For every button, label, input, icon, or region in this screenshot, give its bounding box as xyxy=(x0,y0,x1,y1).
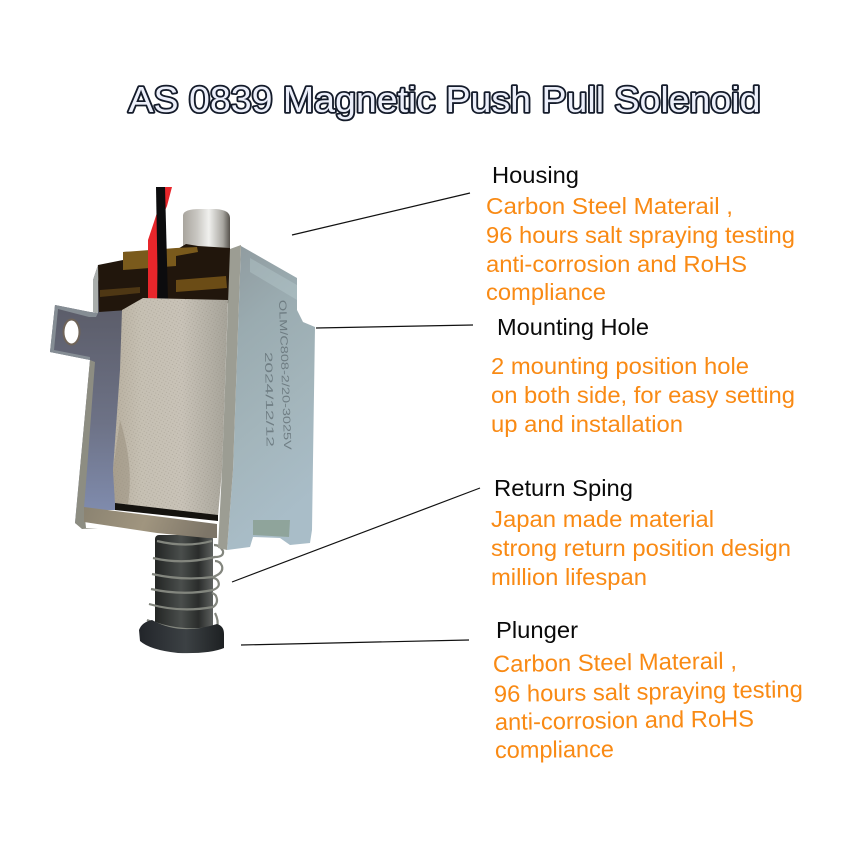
leader line: housing xyxy=(292,193,470,235)
description: mounting hole: on both side, for easy setting xyxy=(491,382,795,408)
description: housing: 96 hours salt spraying testing xyxy=(486,222,795,248)
title: AS 0839 Magnetic Push Pull Solenoid xyxy=(128,79,760,120)
label: plunger: Plunger xyxy=(496,617,578,643)
description: plunger xyxy=(493,648,803,763)
plunger top cylinder xyxy=(183,209,230,252)
description: plunger: 96 hours salt spraying testing xyxy=(494,676,803,707)
label: mounting hole: Mounting Hole xyxy=(497,314,649,340)
description: housing: compliance xyxy=(486,279,606,305)
spring and plunger rod xyxy=(147,535,223,635)
description: mounting hole: up and installation xyxy=(491,411,683,437)
description: housing: anti-corrosion and RoHS xyxy=(486,251,747,277)
mounting hole xyxy=(64,320,80,344)
description: mounting hole: 2 mounting position hole xyxy=(491,353,749,379)
description: housing: Carbon Steel Materail , xyxy=(486,193,733,219)
engraved marking xyxy=(262,300,293,450)
housing side plate xyxy=(227,246,315,550)
description: housing xyxy=(486,193,795,305)
description: return spring xyxy=(491,506,791,590)
label: return spring: Return Sping xyxy=(494,475,633,501)
plunger head xyxy=(139,620,224,653)
engraved marking: OLM/C808-2/20-3025V xyxy=(276,300,293,450)
description: plunger: compliance xyxy=(495,736,614,763)
description: return spring: Japan made material xyxy=(491,506,714,532)
description: plunger: Carbon Steel Materail , xyxy=(493,648,737,677)
housing front edge xyxy=(218,245,241,550)
leader line: return spring xyxy=(232,488,480,582)
description: return spring: strong return position design xyxy=(491,535,791,561)
label: housing: Housing xyxy=(492,162,579,188)
solenoid product illustration xyxy=(50,187,315,653)
wires xyxy=(148,187,172,300)
leader line: plunger xyxy=(241,640,469,645)
description: return spring: million lifespan xyxy=(491,564,647,590)
left frame plate with mounting tab xyxy=(50,265,125,529)
coil wrap xyxy=(113,298,228,516)
description: plunger: anti-corrosion and RoHS xyxy=(495,705,754,735)
engraved marking: 2024/12/12 xyxy=(262,352,276,447)
description: mounting hole xyxy=(491,353,795,437)
bottom frame plate xyxy=(84,503,218,538)
coil bobbin xyxy=(98,244,230,312)
leader line: mounting hole xyxy=(316,325,473,328)
